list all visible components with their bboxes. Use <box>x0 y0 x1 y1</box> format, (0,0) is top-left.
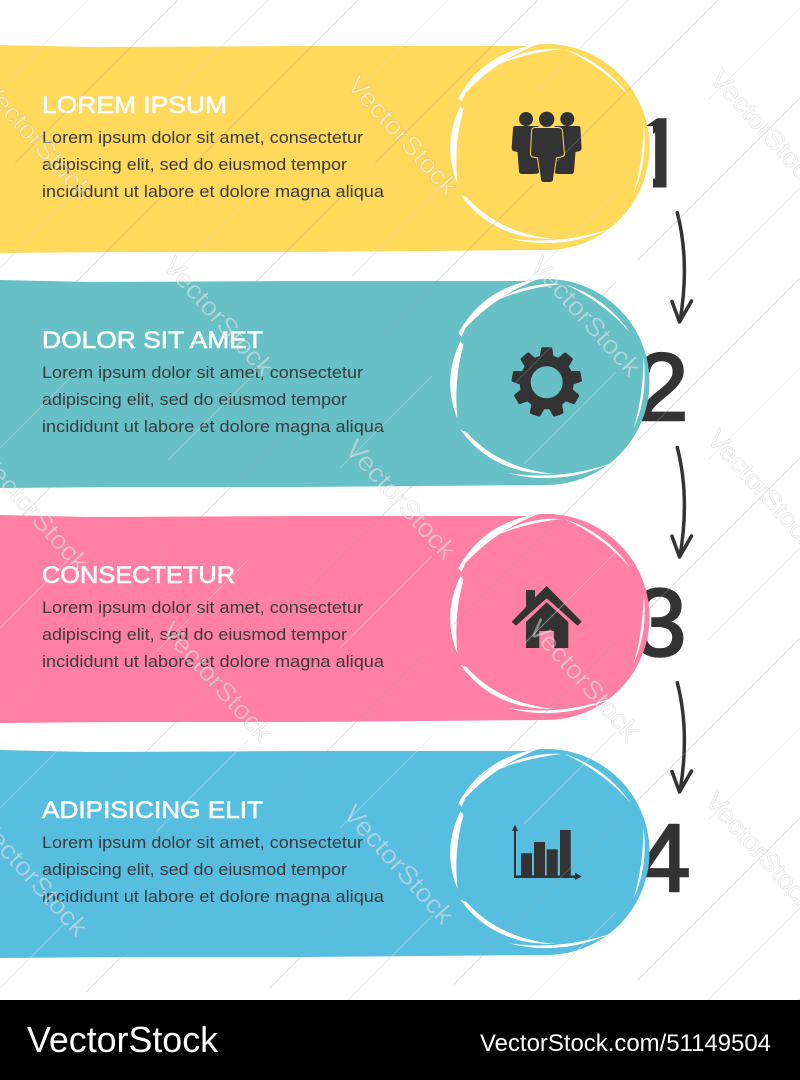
arrow: 2 to 3 <box>672 447 692 557</box>
number 3: 3 <box>633 570 686 676</box>
sketch ring: teal <box>450 279 645 478</box>
body text: Lorem ipsum dolor sit amet, consectetur <box>42 128 363 147</box>
body text: incididunt ut labore et dolore magna aliqua <box>42 182 385 201</box>
heading: DOLOR SIT AMET <box>42 327 263 354</box>
sketch ring: pink <box>450 514 645 713</box>
number 2: 2 <box>635 334 688 441</box>
watermark text: VectorStock <box>524 251 648 383</box>
body text: adipiscing elit, sed do eiusmod tempor <box>42 625 347 644</box>
heading: CONSECTETUR <box>42 562 235 589</box>
watermark text: VectorStock <box>155 616 279 748</box>
arrow: 3 to 4 <box>672 683 692 792</box>
panel: lorem ipsum <box>0 44 650 253</box>
band: pink <box>0 515 545 723</box>
number 4: 4 <box>637 805 690 912</box>
body text <box>42 128 385 201</box>
heading: ADIPISICING ELIT <box>42 797 263 824</box>
circle: blue <box>444 749 650 955</box>
watermark text: VectorStock <box>337 799 461 931</box>
circle: pink <box>444 514 650 720</box>
body text: incididunt ut labore et dolore magna aliqua <box>42 652 385 671</box>
icon: people <box>512 112 582 182</box>
sketch ring: blue <box>450 749 645 948</box>
circle: yellow <box>444 44 650 250</box>
body text: Lorem ipsum dolor sit amet, consectetur <box>42 363 363 382</box>
icon: house <box>512 586 582 648</box>
heading: LOREM IPSUM <box>42 92 227 119</box>
body text: adipiscing elit, sed do eiusmod tempor <box>42 155 347 174</box>
watermark text: VectorStock <box>157 251 281 383</box>
number 1: 1 <box>632 99 687 209</box>
icon: gear <box>511 347 582 418</box>
body text <box>42 363 385 436</box>
body text: incididunt ut labore et dolore magna aliqua <box>42 417 385 436</box>
footer url: VectorStock.com/51149504 <box>480 1030 771 1057</box>
watermark text: VectorStock <box>522 614 646 746</box>
watermark text: VectorStock <box>341 70 465 202</box>
arrow: 1 to 2 <box>672 213 692 322</box>
body text <box>42 598 385 671</box>
panel: dolor sit amet <box>0 279 650 488</box>
band: teal <box>0 280 545 488</box>
body text <box>42 833 385 906</box>
band: yellow <box>0 45 545 253</box>
body text: adipiscing elit, sed do eiusmod tempor <box>42 860 347 879</box>
body text: adipiscing elit, sed do eiusmod tempor <box>42 390 347 409</box>
footer bar <box>0 1000 800 1080</box>
icon: bar chart <box>512 824 582 880</box>
body text: Lorem ipsum dolor sit amet, consectetur <box>42 833 363 852</box>
footer logo: VectorStock <box>27 1019 219 1060</box>
panel: adipisicing elit <box>0 749 650 958</box>
sketch ring: yellow <box>450 44 645 243</box>
body text: incididunt ut labore et dolore magna aliqua <box>42 887 385 906</box>
panel: consectetur <box>0 514 650 723</box>
body text: Lorem ipsum dolor sit amet, consectetur <box>42 598 363 617</box>
band: blue <box>0 750 545 958</box>
circle: teal <box>444 279 650 485</box>
watermark text: VectorStock <box>339 434 463 566</box>
